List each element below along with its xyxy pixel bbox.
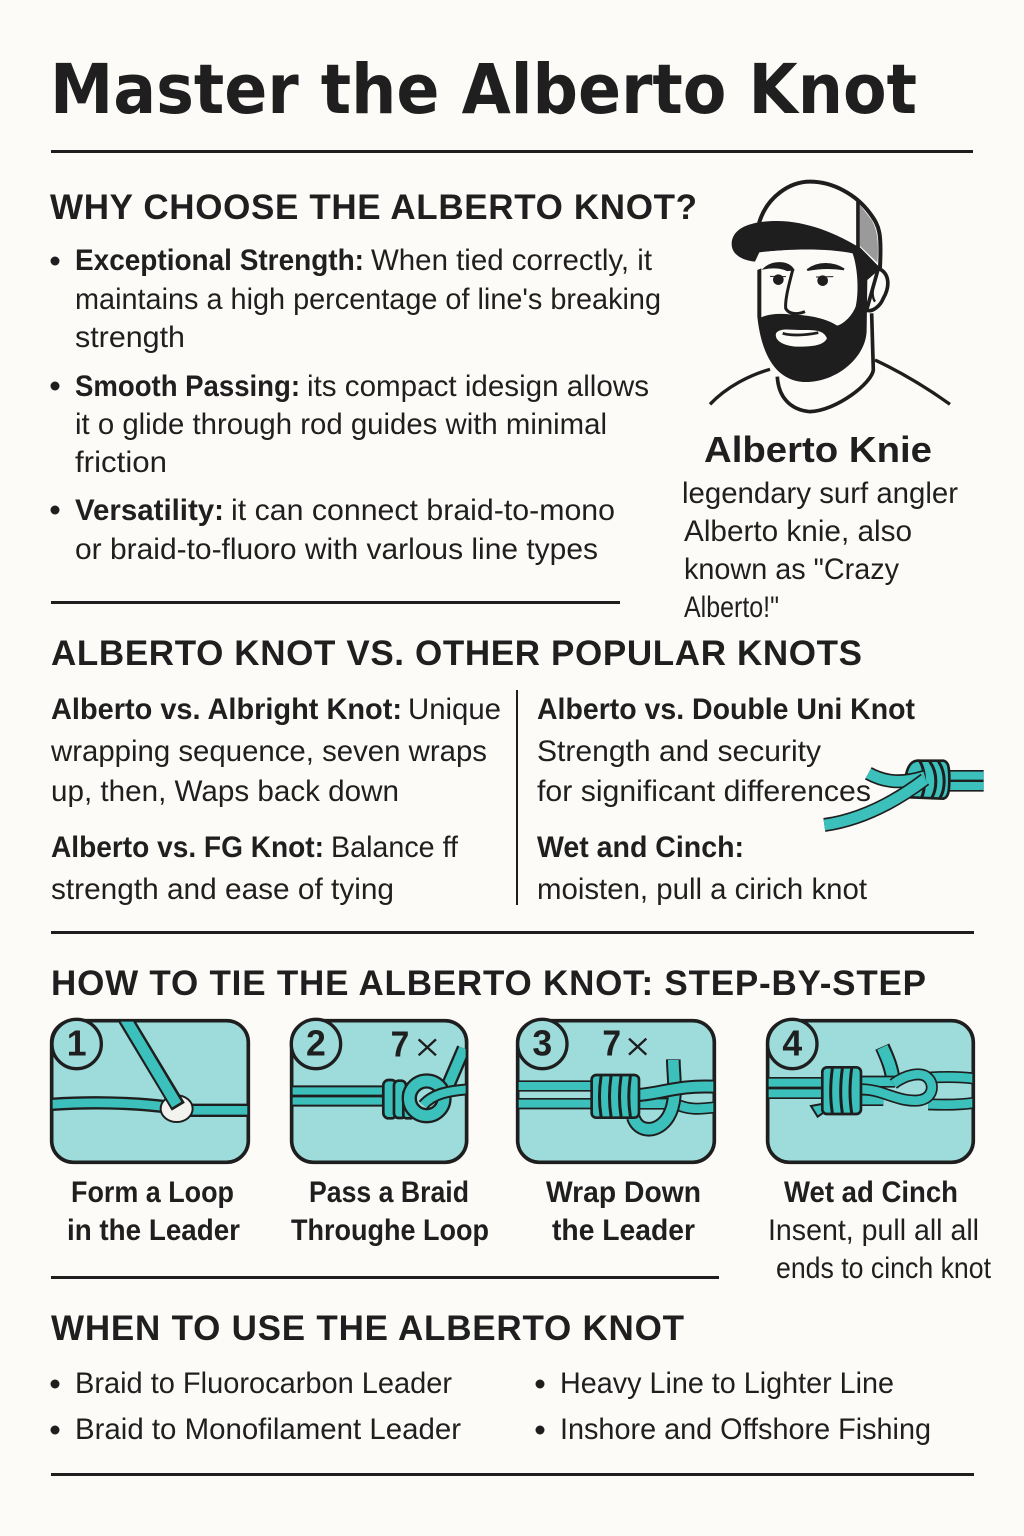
bullet: exceptional strength: maintains a high percentage of line's breaking: [75, 283, 661, 316]
bullet: versatility: Versatility:: [75, 494, 224, 527]
comparison: Double Uni: [537, 693, 915, 808]
panel: comparison with other knots: [50, 634, 984, 906]
step 3 label: [546, 1176, 701, 1247]
bullet: exceptional strength: [50, 244, 661, 354]
heading: how to tie: HOW TO TIE THE ALBERTO KNOT: STEP-BY-STEP: [51, 964, 926, 1003]
comparison: Double Uni: for significant differences: [537, 775, 871, 808]
step 4 illustration: [768, 1019, 975, 1162]
step 1 illustration: [52, 1018, 248, 1162]
step 2 illustration: [291, 1019, 468, 1162]
bullet: smooth passing: friction: [75, 446, 167, 479]
title: Master the Alberto Knot: [50, 50, 917, 130]
comparison: Albright: Alberto vs. Albright Knot:: [51, 693, 402, 726]
bullet: versatility: it can connect braid-to-mono: [231, 494, 615, 527]
comparison: Wet and Cinch: moisten, pull a cirich knot: [537, 873, 868, 906]
icon: portrait of Alberto: [710, 182, 950, 412]
bullet: braid to fluorocarbon: Braid to Fluorocarbon Leader: [75, 1367, 452, 1400]
heading: when to use: WHEN TO USE THE ALBERTO KNOT: [51, 1309, 684, 1348]
bullet: smooth passing: Smooth Passing:: [75, 370, 300, 403]
bullet: exceptional strength: strength: [75, 321, 185, 354]
bullet: smooth passing: [50, 370, 649, 479]
comparison: FG: Balance ff: [331, 831, 459, 864]
bullet: smooth passing: its compact idesign allows: [307, 370, 649, 403]
bio text: Alberto knie, also: [684, 515, 912, 548]
step 1 label: in the Leader: [67, 1214, 240, 1247]
step 2 label: Pass a Braid: [309, 1176, 469, 1209]
ear: [867, 268, 888, 311]
comparison: Albright: up, then, Waps back down: [51, 775, 399, 808]
face: [761, 249, 858, 326]
comparison: Double Uni: Alberto vs. Double Uni Knot: [537, 693, 915, 726]
step 2 label: [291, 1176, 489, 1247]
comparison: FG: strength and ease of tying: [51, 873, 394, 906]
icon: finished knot: [824, 761, 984, 825]
comparison: Albright: Unique: [408, 693, 501, 726]
eyes: [770, 274, 833, 286]
step 1 label: [67, 1176, 240, 1247]
cap brim: [732, 221, 861, 262]
step 2 illustration: 2: [306, 1024, 326, 1064]
beard and hair: [757, 247, 881, 382]
bio text: Alberto!": [684, 591, 779, 624]
step 4 label: Wet ad Cinch: [784, 1176, 958, 1209]
bullet: exceptional strength: When tied correctly, it: [371, 244, 653, 277]
heading: why choose: WHY CHOOSE THE ALBERTO KNOT?: [50, 188, 697, 227]
eyebrows and nose: [763, 263, 844, 314]
ear detail: [873, 285, 875, 302]
step 1 label: Form a Loop: [71, 1176, 234, 1209]
mouth: [776, 330, 827, 347]
bio text: [682, 477, 958, 624]
comparison: Albright: wrapping sequence, seven wraps: [50, 735, 487, 768]
bullet: braid to monofilament: Braid to Monofilament Leader: [75, 1413, 461, 1446]
step 2 label: Throughe Loop: [291, 1214, 489, 1247]
bio text: legendary surf angler: [682, 477, 958, 510]
bullet: inshore and offshore: Inshore and Offshore Fishing: [560, 1413, 931, 1446]
comparison: Wet and Cinch: Wet and Cinch:: [537, 831, 744, 864]
comparison: FG: Alberto vs. FG Knot:: [51, 831, 324, 864]
bullet: versatility: [50, 494, 615, 566]
panel: Alberto bio: [682, 429, 958, 624]
step 1 illustration: 1: [67, 1024, 87, 1064]
bullet: versatility: or braid-to-fluoro with varlous line types: [75, 533, 598, 566]
name: Alberto Knie: [704, 429, 932, 470]
shoulders and neck: [710, 313, 950, 412]
bullet: heavy to lighter line: Heavy Line to Lighter Line: [560, 1367, 894, 1400]
step 2 illustration: 7: [391, 1025, 409, 1065]
step 3 illustration: 3: [532, 1024, 552, 1064]
step 4 illustration: 4: [782, 1024, 802, 1064]
comparison: Double Uni: Strength and security: [537, 735, 821, 768]
step 4 label: ends to cinch knot: [776, 1252, 992, 1285]
step 4 label: Insent, pull all all: [768, 1214, 979, 1247]
bio text: known as "Crazy: [684, 553, 899, 586]
step 4 label: [768, 1176, 992, 1285]
step 3 label: the Leader: [552, 1214, 695, 1247]
heading: comparison: ALBERTO KNOT VS. OTHER POPULAR KNOTS: [51, 634, 862, 673]
bullet: exceptional strength: Exceptional Strength:: [75, 244, 364, 277]
step 3 illustration: [518, 1019, 715, 1162]
panel: when to use: [50, 1309, 931, 1446]
panel: how to tie: [51, 964, 992, 1285]
comparison: Albright: [50, 693, 501, 808]
step 3 label: Wrap Down: [546, 1176, 701, 1209]
cap crown: [759, 182, 881, 268]
comparison: Wet and Cinch: [537, 831, 868, 906]
comparison: FG: [51, 831, 459, 906]
bullet: smooth passing: it o glide through rod guides with minimal: [75, 408, 607, 441]
panel: why choose: [50, 188, 697, 566]
step 3 illustration: 7: [602, 1024, 621, 1064]
